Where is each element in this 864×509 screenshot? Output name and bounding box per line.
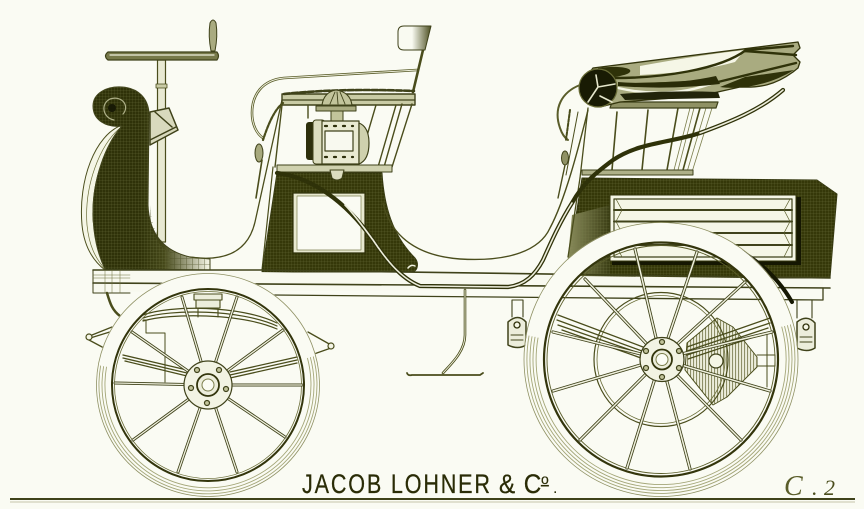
chassis beam [93, 270, 830, 300]
superscript o: o [541, 471, 549, 487]
folded canopy [579, 42, 800, 107]
carriage lamp [306, 90, 369, 180]
headrest [398, 26, 431, 50]
curved fender strip [277, 90, 783, 287]
maker's name: JACOB LOHNER [302, 470, 490, 500]
front footwell curve and seat pillar [190, 100, 282, 270]
front springs and links [86, 293, 334, 382]
plate number: letter: C [784, 471, 803, 502]
dashboard scroll panel [81, 87, 210, 270]
rear seat back [558, 85, 718, 198]
rear dark body box [566, 178, 837, 278]
central dark seat box [262, 173, 417, 272]
rear springs and drive gear [508, 292, 815, 426]
front seat back [252, 50, 423, 198]
ampersand and company: & C [499, 470, 541, 499]
trailing period: . [553, 480, 557, 497]
ground line [10, 499, 855, 502]
plate number: digit: . 2 [812, 475, 835, 500]
stand pedal [407, 290, 483, 375]
rear pillar and body curve [383, 108, 588, 259]
front wheel [96, 274, 320, 496]
steering column and tiller wheel [106, 20, 218, 242]
rear wheel [524, 222, 798, 496]
